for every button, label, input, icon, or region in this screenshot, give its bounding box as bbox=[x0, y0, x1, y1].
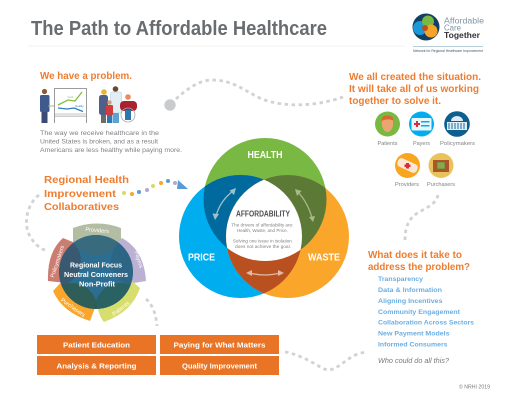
box: paying for what matters: Paying for What Matters bbox=[174, 342, 266, 350]
hub text: Neutral Conveners bbox=[64, 272, 128, 279]
problem text: Americans are less healthy while paying more. bbox=[40, 147, 182, 154]
list of requirements: Aligning Incentives bbox=[378, 298, 443, 305]
presenter bbox=[40, 89, 58, 123]
petal: purchasers: Purchasers bbox=[59, 298, 86, 319]
heading: we all created the situation: We all created the situation. bbox=[349, 71, 481, 83]
illustration: presenter with chart and people bbox=[40, 86, 137, 123]
heading: we all created the situation: together to solve it. bbox=[349, 95, 441, 107]
dotted path: problem to situation bbox=[164, 80, 343, 111]
stakeholder: purchasers: Purchasers bbox=[427, 182, 455, 188]
box: patient education bbox=[37, 335, 156, 354]
box: analysis and reporting bbox=[37, 356, 156, 375]
chart board bbox=[54, 88, 86, 123]
logo: Affordable Care Together: Affordable bbox=[444, 16, 485, 26]
heading: what does it take: What does it take to bbox=[368, 249, 462, 261]
heading: we all created the situation: It will take all of us working bbox=[349, 83, 479, 95]
text: drivers of affordability: Health, Waste, and Price. bbox=[237, 228, 288, 233]
label: health: HEALTH bbox=[248, 150, 282, 161]
stakeholder: policymakers bbox=[440, 111, 475, 147]
dotted path: situation to question bbox=[405, 195, 438, 240]
chart board: Cost bbox=[68, 95, 73, 99]
people group bbox=[99, 86, 137, 123]
heading: we have a problem: We have a problem. bbox=[40, 70, 132, 82]
venn diagram bbox=[179, 138, 349, 298]
box: quality improvement: Quality Improvement bbox=[182, 364, 258, 370]
problem text: The way we receive healthcare in the bbox=[40, 130, 159, 137]
petal: policymakers: Policymakers bbox=[50, 245, 66, 278]
collaborative wheel bbox=[48, 224, 146, 322]
logo: Affordable Care Together: Together bbox=[444, 31, 480, 40]
problem text: United States is broken, and as a result bbox=[40, 138, 158, 146]
title: The Path to Affordable Healthcare bbox=[31, 18, 327, 40]
list of requirements: New Payment Models bbox=[378, 330, 450, 338]
box: analysis and reporting: Analysis & Reporting bbox=[56, 364, 136, 370]
chart board: Quality bbox=[75, 104, 84, 108]
heading: regional health improvement collaboratives: Regional Health bbox=[44, 174, 129, 186]
center: affordability bbox=[226, 180, 302, 261]
heading: regional health improvement collaboratives: Collaboratives bbox=[44, 201, 119, 213]
arrow: health and waste bbox=[295, 189, 315, 222]
stakeholder: patients: Patients bbox=[378, 141, 398, 147]
dotted connector to venn bbox=[122, 179, 188, 196]
list of requirements: Transparency bbox=[378, 276, 423, 283]
stakeholder: purchasers bbox=[427, 153, 455, 188]
dotted path: boxes to question bbox=[285, 352, 367, 370]
petal: providers: Providers bbox=[85, 227, 109, 235]
hub text: Regional Focus bbox=[70, 262, 122, 270]
list of requirements: Collaboration Across Sectors bbox=[378, 320, 474, 326]
box: paying for what matters bbox=[160, 335, 279, 354]
hub text: Non-Profit bbox=[79, 282, 116, 288]
circle: health bbox=[204, 138, 326, 261]
text: drivers of affordability: Solving one issue in isolation bbox=[233, 238, 292, 244]
logo: Affordable Care Together: Network for Regional Healthcare Improvement bbox=[413, 49, 483, 53]
hub bbox=[59, 235, 133, 309]
logo: Affordable Care Together: Care bbox=[444, 24, 462, 32]
circle: price bbox=[179, 175, 302, 298]
dotted path: left curve bbox=[26, 195, 45, 250]
dotted path: wheel to boxes bbox=[146, 299, 157, 326]
list of requirements: Informed Consumers bbox=[378, 342, 448, 348]
overlap: health and price bbox=[204, 175, 264, 248]
list of requirements: Community Engagement bbox=[378, 309, 461, 316]
stakeholder: payers: Payers bbox=[413, 141, 430, 147]
stakeholder: providers: Providers bbox=[395, 182, 419, 188]
label: affordability: AFFORDABILITY bbox=[236, 210, 291, 218]
heading: regional health improvement collaboratives: Improvement bbox=[44, 188, 117, 200]
text: drivers of affordability: does not achieve the goal. bbox=[235, 244, 291, 249]
copyright: © NRHI 2019 bbox=[459, 384, 490, 390]
arrow: price and waste bbox=[246, 270, 284, 276]
list of requirements: Data & Information bbox=[378, 287, 442, 294]
stakeholder: providers bbox=[395, 153, 420, 188]
petal: patients: Patients bbox=[112, 301, 131, 318]
stakeholder: payers bbox=[409, 112, 434, 147]
box: quality improvement bbox=[160, 356, 279, 375]
text: drivers of affordability: The drivers of affordability are: bbox=[231, 222, 293, 228]
stakeholder: policymakers: Policymakers bbox=[440, 141, 475, 147]
circle: waste bbox=[226, 175, 349, 298]
label: price: PRICE bbox=[188, 252, 215, 264]
overlap: health and waste bbox=[226, 175, 326, 250]
box: patient education: Patient Education bbox=[63, 342, 130, 350]
logo: Affordable Care Together bbox=[412, 14, 485, 53]
petal: payers: Payers bbox=[132, 250, 144, 269]
label: waste: WASTE bbox=[308, 252, 340, 264]
arrow: health and price bbox=[212, 188, 236, 220]
stakeholder: patients bbox=[375, 112, 400, 147]
overlap: price and waste bbox=[226, 180, 302, 294]
heading: what does it take: address the problem? bbox=[368, 261, 470, 273]
question: who could do all this: Who could do all this? bbox=[378, 358, 449, 365]
